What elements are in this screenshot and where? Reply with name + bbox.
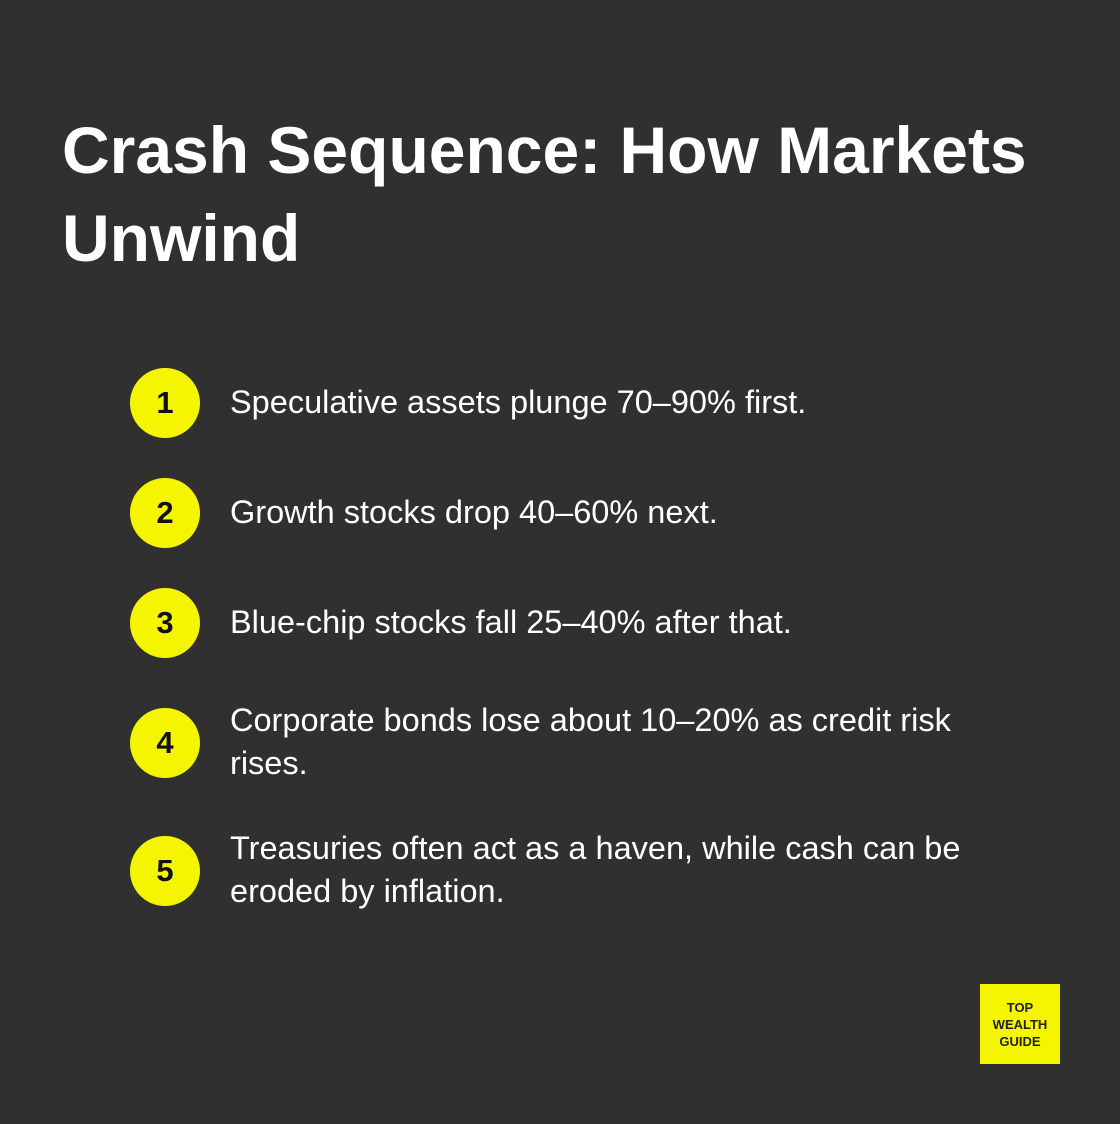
item 1 [130, 368, 806, 438]
item 2: 2 [156, 495, 174, 530]
item 1: 1 [156, 385, 174, 420]
item 1: Speculative assets plunge 70–90% first. [230, 384, 806, 420]
item 5: Treasuries often act as a haven, while cash can be eroded by inflation. [230, 830, 960, 909]
title: Crash Sequence: How Markets Unwind [62, 113, 1027, 275]
logo [980, 984, 1060, 1064]
item 4: Corporate bonds lose about 10–20% as credit risk rises. [230, 702, 951, 781]
item 3 [130, 588, 792, 658]
logo: TOP [1007, 1000, 1033, 1014]
item 2: Growth stocks drop 40–60% next. [230, 494, 718, 530]
logo: GUIDE [999, 1034, 1041, 1048]
item 5: 5 [156, 853, 174, 888]
item 2 [130, 478, 718, 548]
item 3: 3 [156, 605, 174, 640]
item 3: Blue-chip stocks fall 25–40% after that. [230, 604, 792, 640]
item 4: 4 [156, 725, 174, 760]
logo: WEALTH [993, 1016, 1047, 1032]
